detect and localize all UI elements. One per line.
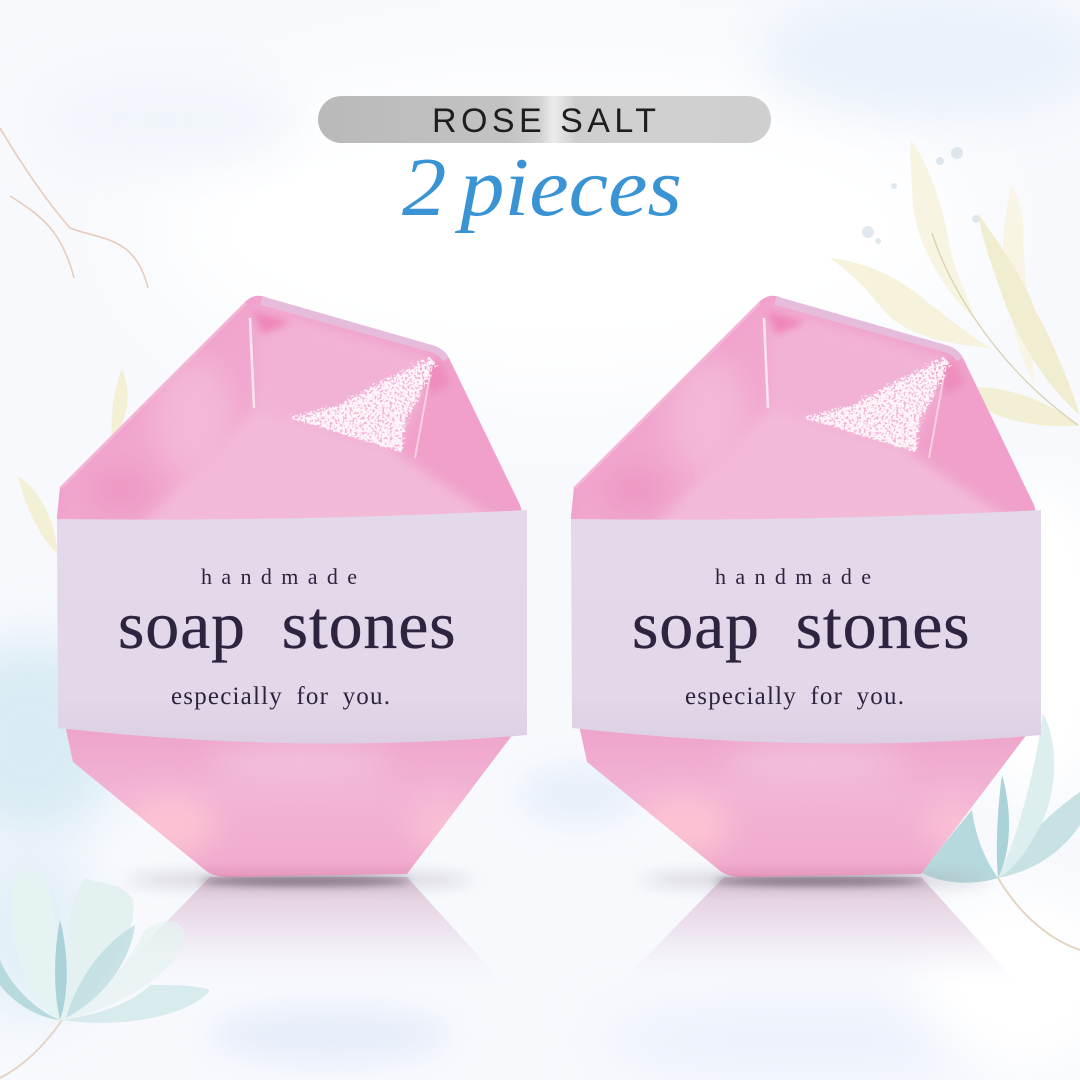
soap: left product	[50, 290, 540, 886]
decorative leaves: top right	[830, 140, 1080, 426]
soap shadow	[639, 874, 989, 886]
decorative leaves: behind left soap	[18, 368, 127, 555]
decorative branch: top left	[0, 128, 148, 288]
decorative flower: bottom left	[0, 870, 210, 1078]
soap upper body	[564, 290, 1054, 535]
soap lower body	[574, 725, 1044, 880]
label: handmade: handmade	[715, 564, 871, 589]
label: soap stones: soap stones	[632, 587, 970, 663]
label: soap stones: soap stones	[118, 587, 456, 663]
soap upper body	[50, 290, 540, 535]
label: handmade: handmade	[201, 564, 357, 589]
reflection: right soap	[619, 877, 1019, 985]
title pill: Rose Salt	[318, 96, 771, 143]
subtitle: 2 pieces: 2 pieces	[402, 141, 682, 234]
title pill: Rose Salt: ROSE SALT	[432, 102, 656, 140]
soap label band	[571, 510, 1041, 744]
decorative flower: bottom right	[922, 713, 1080, 950]
soap shadow	[125, 874, 475, 886]
soap label band	[57, 510, 527, 744]
reflection: left soap	[105, 877, 505, 985]
soap lower body	[60, 725, 530, 880]
soap: right product	[564, 290, 1054, 886]
label: especially for you: especially for you.	[685, 683, 905, 710]
label: especially for you: especially for you.	[171, 683, 391, 710]
